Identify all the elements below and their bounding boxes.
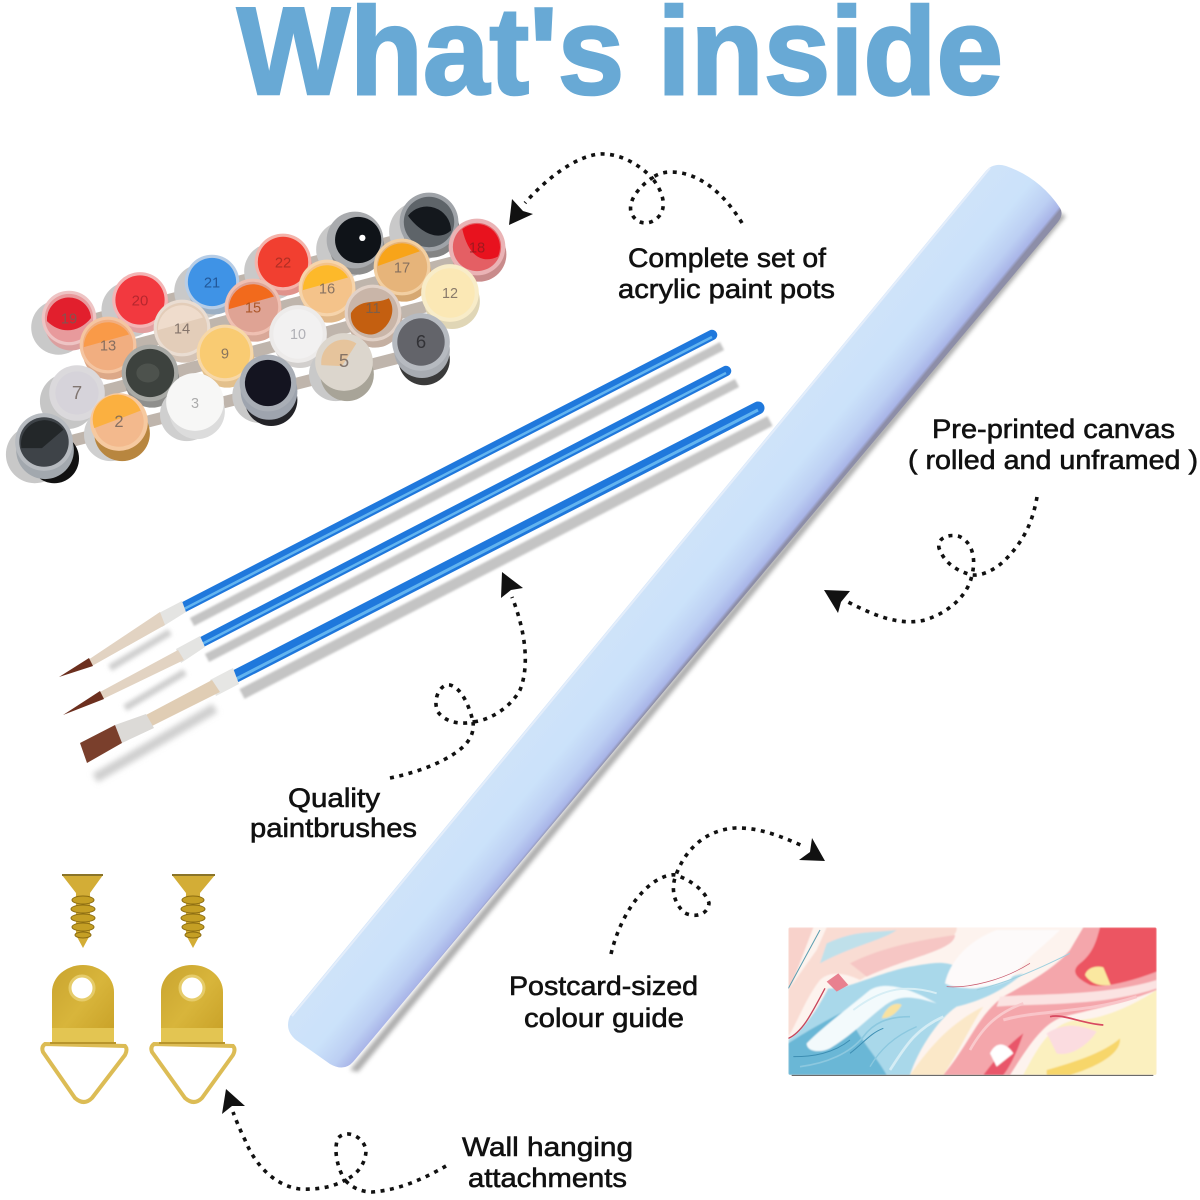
screw left [62,875,103,948]
arrow: hanging attachments [222,1089,446,1192]
pot 12 [421,264,480,329]
hanger right [151,965,234,1102]
pot 4 [232,355,297,426]
pot 8 [122,345,179,408]
pot 16: 16 [319,281,335,297]
arrow: brushes [390,572,525,778]
pot 5: 5 [339,350,349,371]
pot 21 [174,255,240,319]
brush 2 [63,371,737,715]
pot 7 [40,365,105,429]
pot 7: 7 [72,382,82,403]
pot 5 [309,333,374,401]
pot dark top [389,193,459,261]
label: canvas [908,414,1198,475]
label: hanging attachments [462,1132,633,1193]
label: paint pots [618,243,835,304]
pot 22 [244,234,312,300]
pot 14: 14 [174,321,190,337]
label: hanging attachments: attachments [468,1163,627,1193]
pot 2: 2 [114,413,124,431]
pot 9: 9 [221,346,229,362]
label: colour guide: Postcard-sized [509,971,698,1001]
arrow: colour guide [611,828,825,954]
screw right [172,875,215,948]
pot 21: 21 [204,275,220,291]
label: brushes: Quality [288,783,381,813]
pot 12: 12 [442,286,458,302]
pot 13 [80,317,137,380]
pot 16 [299,260,356,323]
pot black top [316,212,384,278]
pot 20: 20 [132,292,148,309]
pot 11: 11 [365,301,381,317]
pot 20 [101,272,169,337]
pot 2 [84,393,150,461]
pot 22: 22 [275,255,291,271]
label: brushes: paintbrushes [250,813,417,843]
pot 6 [392,313,450,385]
label: paint pots: acrylic paint pots [618,274,835,304]
pot 15 [225,279,282,342]
hanger left [42,965,127,1102]
pot 3 [160,373,225,441]
pot 14 [154,300,211,363]
label: canvas: ( rolled and unframed ) [908,445,1198,475]
label: colour guide: colour guide [524,1003,684,1033]
paintbrushes [59,335,770,778]
pot 19 [31,291,97,355]
canvas roll [288,165,1066,1072]
pot 6: 6 [416,331,426,352]
pot 9 [197,325,254,388]
brush 3 [80,408,770,778]
pot 19: 19 [61,311,77,327]
colour guide postcard [788,927,1157,1075]
pot 15: 15 [245,300,261,316]
arrow: canvas [824,497,1037,622]
label: hanging attachments: Wall hanging [462,1132,633,1162]
pot 10: 10 [290,327,306,343]
label: brushes [250,783,417,843]
pot 18: 18 [469,240,485,256]
arrow: paint pots [509,154,742,225]
pot 10 [269,305,327,368]
pot 11 [345,285,402,348]
hanging hardware [42,875,235,1102]
label: colour guide [509,971,698,1033]
label: paint pots: Complete set of [628,243,827,273]
pot 3: 3 [191,396,199,412]
brush 1 [59,335,722,677]
pot 1 [6,413,79,483]
pot 17: 17 [394,260,410,276]
pot 13: 13 [100,338,116,354]
pot 18 [449,219,506,282]
pot 17 [374,239,431,302]
paint pots set [6,193,506,483]
label: canvas: Pre-printed canvas [932,414,1175,444]
